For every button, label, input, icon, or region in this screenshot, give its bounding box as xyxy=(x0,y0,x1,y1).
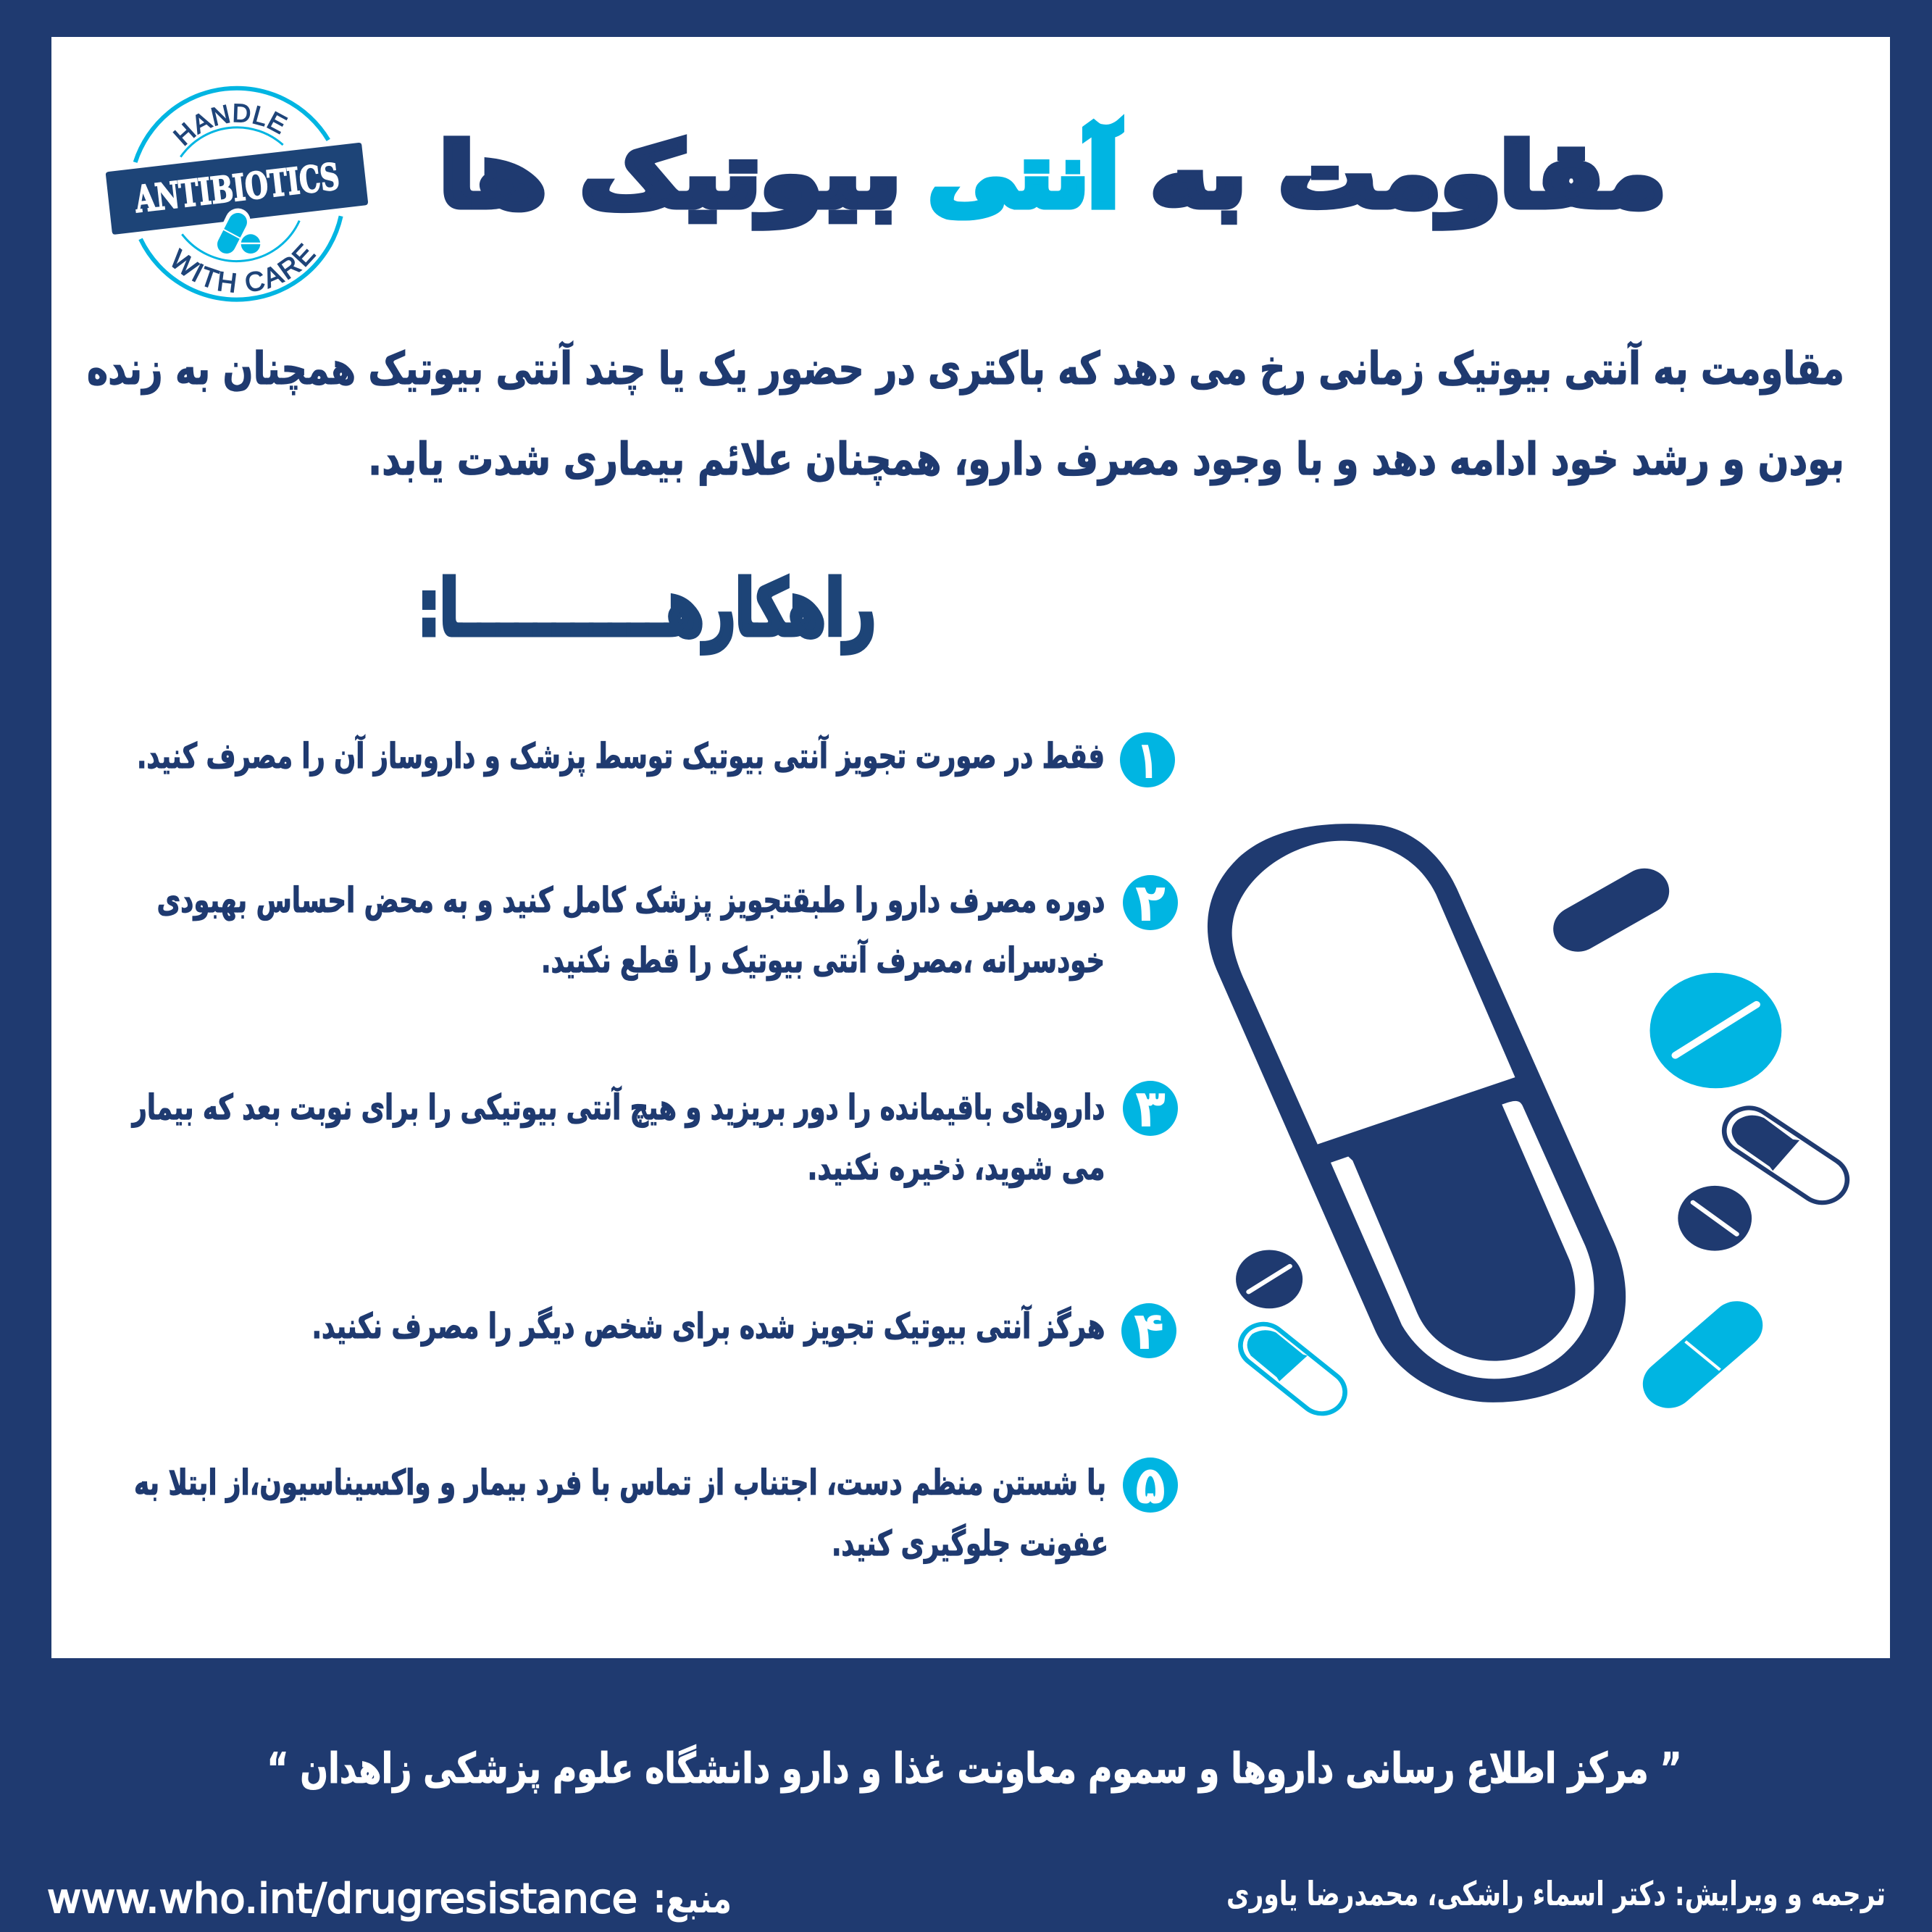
icon: dark tablet right xyxy=(1678,1186,1752,1251)
intro paragraph xyxy=(87,340,1844,485)
badge: handle antibiotics with care: WITH CARE xyxy=(172,243,316,293)
footer: source url: منبع: xyxy=(653,1875,732,1923)
icon: cyan tablet xyxy=(1650,973,1781,1088)
number badge 1 xyxy=(1120,729,1175,790)
icon: dark tablet left xyxy=(1236,1250,1302,1308)
white content panel xyxy=(51,37,1890,1658)
solution 5: با شستن منظم دست، اجتناب از تماس با فرد بیمار و واکسیناسیون،از ابتلا به xyxy=(134,1463,1106,1503)
solution 3: می شوید، ذخیره نکنید. xyxy=(807,1147,1105,1188)
title: مقاومت به xyxy=(1151,126,1665,227)
solution 2 xyxy=(156,872,1178,981)
heading: solutions: راهکارهـــــــــــا: xyxy=(418,564,876,653)
solution 3: داروهای باقیمانده را دور بریزید و هیچ آنتی بیوتیکی را برای نوبت بعد که بیمار xyxy=(131,1086,1105,1128)
number badge 3 xyxy=(1123,1078,1178,1139)
number badge 5 xyxy=(1123,1455,1178,1515)
number badge 1: ۱ xyxy=(1137,729,1158,790)
solution 4 xyxy=(311,1300,1176,1361)
title: بیوتیک ها xyxy=(440,126,900,227)
solution 2: دوره مصرف دارو را طبقتجویز پزشک کامل کنید و به محض احساس بهبودی xyxy=(156,880,1105,921)
title: آنتی xyxy=(929,122,1121,227)
number badge 2: ۲ xyxy=(1135,872,1166,933)
number badge 5: ۵ xyxy=(1135,1455,1166,1515)
footer: source url: www.who.int/drugresistance xyxy=(47,1875,637,1923)
solution 3 xyxy=(131,1078,1178,1188)
solution 1 xyxy=(137,729,1175,790)
badge: handle antibiotics with care xyxy=(106,85,368,302)
number badge 4 xyxy=(1121,1300,1176,1361)
solution 5 xyxy=(134,1455,1178,1564)
icon: dark solid pill xyxy=(1578,891,1644,929)
icon: dark outlined capsule xyxy=(1732,1116,1823,1179)
number badge 3: ۳ xyxy=(1135,1078,1166,1139)
solution 2: خودسرانه ،مصرف آنتی بیوتیک را قطع نکنید. xyxy=(541,939,1105,981)
title xyxy=(440,122,1665,227)
solution 4: هرگز آنتی بیوتیک تجویز شده برای شخص دیگر را مصرف نکنید. xyxy=(311,1305,1105,1347)
icon: large capsule xyxy=(1208,824,1626,1402)
badge: handle antibiotics with care: HANDLE xyxy=(172,104,288,146)
solution 5: عفونت جلوگیری کنید. xyxy=(832,1523,1108,1564)
number badge 2 xyxy=(1123,872,1178,933)
icon: cyan outlined capsule xyxy=(1247,1330,1322,1392)
pills illustration xyxy=(1208,824,1823,1402)
badge: handle antibiotics with care: ANTIBIOTICS xyxy=(132,155,341,221)
icon: cyan solid pill xyxy=(1669,1325,1737,1384)
solution 1: فقط در صورت تجویز آنتی بیوتیک توسط پزشک و داروساز آن را مصرف کنید. xyxy=(137,735,1105,777)
number badge 4: ۴ xyxy=(1134,1300,1164,1361)
